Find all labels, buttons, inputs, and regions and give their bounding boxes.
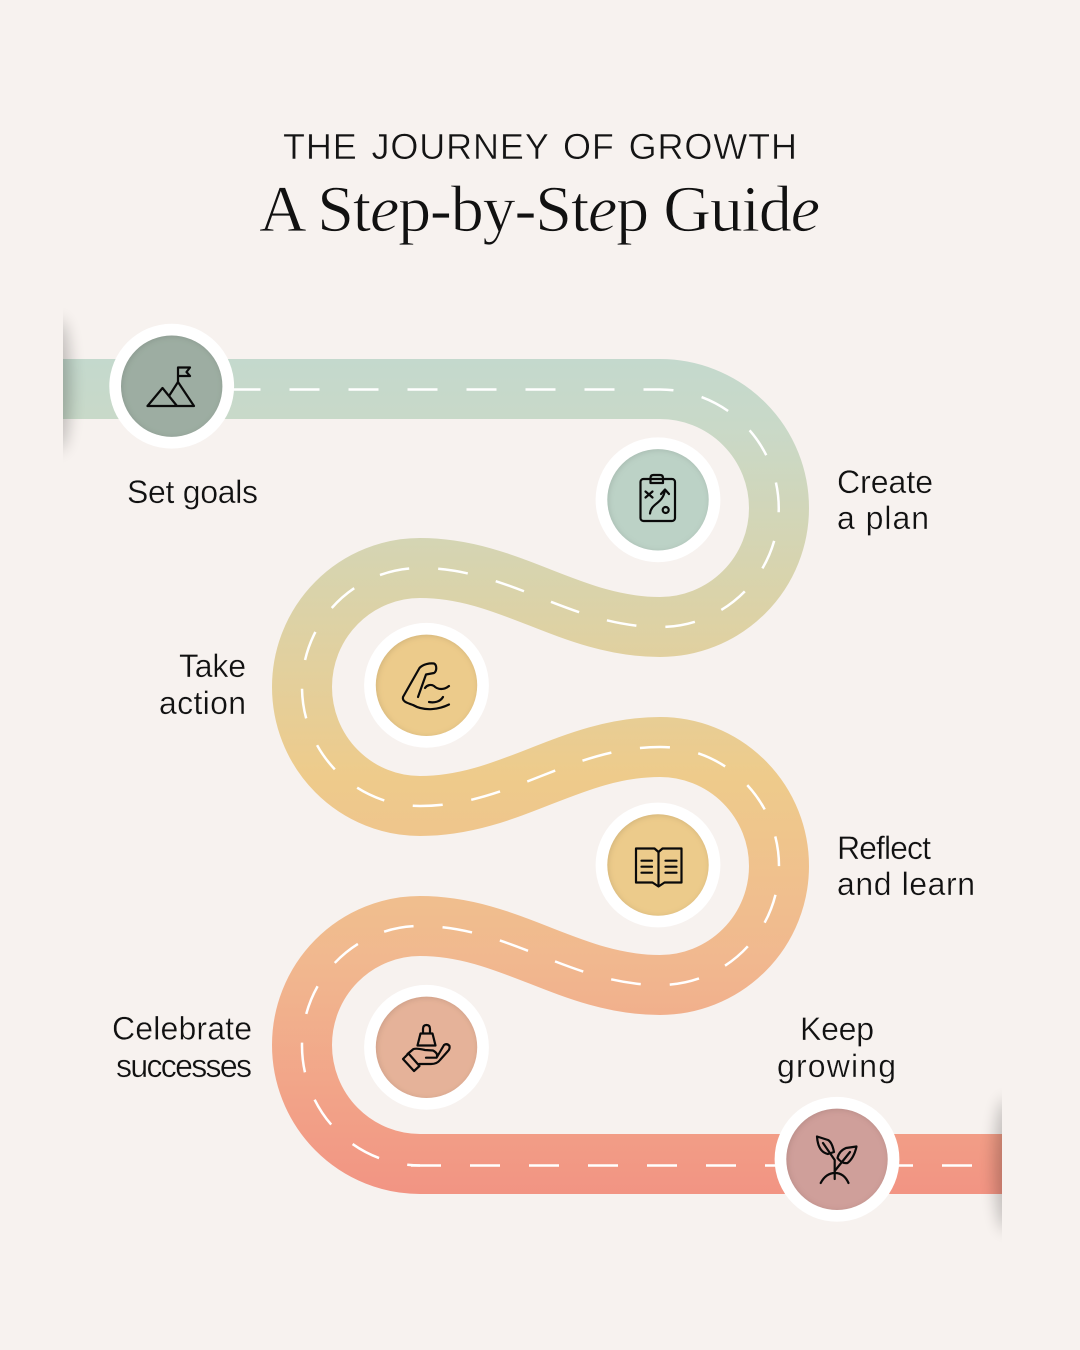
marker circle [109,324,234,449]
step 6: keep growing [775,1011,899,1222]
step 1: set goals [109,324,258,510]
icon: sprout [817,1136,856,1183]
label [837,830,975,902]
icon: open book [636,848,682,886]
label: Keep [800,1011,874,1047]
marker circle [596,437,720,562]
step 2: create a plan [596,437,933,562]
label: a plan [837,500,929,536]
label: Take [179,648,246,684]
road band [63,389,1002,1164]
marker circle [364,985,489,1110]
label: Celebrate [112,1010,252,1046]
icon: mountain with flag [148,368,194,406]
marker circle [596,803,720,927]
label: action [159,685,246,721]
right road edge shadow [987,1098,1002,1232]
infographic canvas [63,134,1002,1232]
marker circle [364,623,489,748]
label [112,1010,252,1084]
title [259,126,820,246]
label [777,1011,896,1084]
left road edge shadow [63,318,78,452]
label: growing [777,1048,896,1084]
road centre dashes: curves [172,390,779,1166]
marker circle [775,1097,899,1222]
label: and learn [837,866,975,902]
label: Set goals [127,474,258,510]
winding road [46,319,1019,1231]
label: Reflect [837,830,931,866]
eyebrow heading: THE JOURNEY OF GROWTH [283,126,797,167]
road centre dashes: final straight [411,1164,985,1167]
label [159,648,246,721]
main heading: A Step-by-Step Guide [259,173,820,246]
icon: clipboard with play [640,475,675,521]
label [837,464,933,536]
icon: flexed arm [403,663,449,709]
icon: hand holding bag [403,1025,450,1071]
step 3: take action [159,623,489,748]
label: Create [837,464,933,500]
step 5: celebrate successes [112,985,489,1110]
label: successes [116,1048,252,1084]
step 4: reflect and learn [596,803,975,927]
